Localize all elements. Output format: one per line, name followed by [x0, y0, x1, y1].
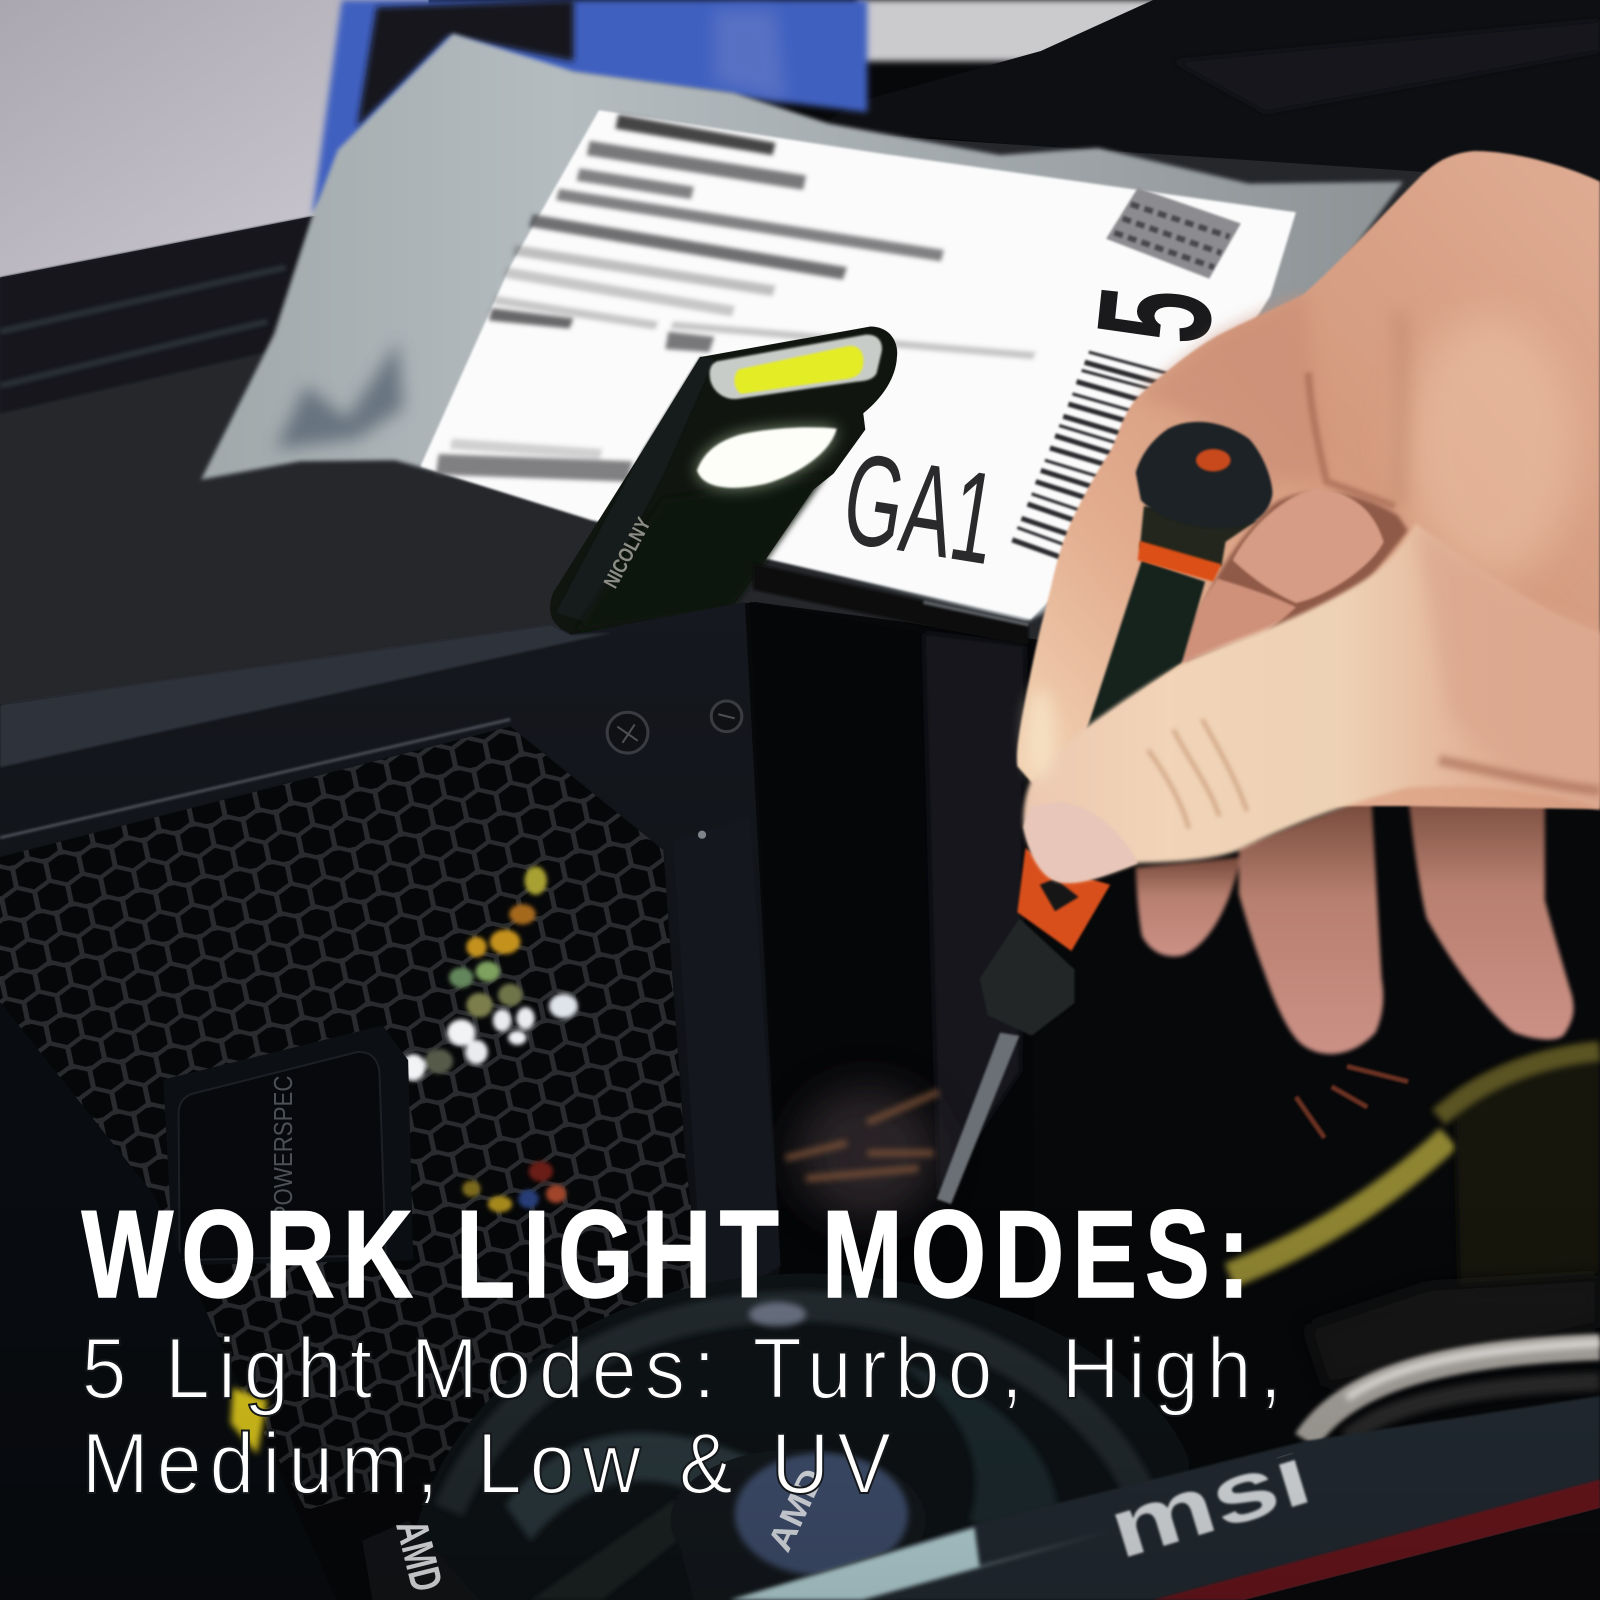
thumbnail — [1023, 802, 1138, 882]
index finger crease — [1308, 372, 1395, 506]
fan hub — [670, 1449, 926, 1592]
knuckle wrinkles — [1148, 719, 1247, 829]
power supply mark: POWERSPEC — [270, 1076, 298, 1220]
hand — [1017, 151, 1600, 809]
screw — [607, 712, 648, 753]
subheading line 2: Medium, Low & UV — [82, 1414, 891, 1511]
body — [550, 327, 897, 634]
hex knob — [980, 918, 1074, 1036]
dark insert — [357, 0, 573, 128]
red stripe — [1153, 1480, 1600, 1600]
body side — [556, 357, 714, 622]
right case strip — [673, 816, 781, 1316]
main lens glow — [697, 427, 837, 488]
plastic bag — [201, 34, 1403, 622]
fan strut — [531, 1500, 704, 1600]
honeycomb vent grill — [0, 727, 781, 1510]
fingertip highlight — [1027, 689, 1055, 781]
blue object — [312, 0, 867, 214]
tucked finger shadow — [1184, 492, 1408, 663]
bottom darkening — [0, 1204, 1600, 1600]
thumb base crease — [1439, 760, 1600, 791]
heat pipe shadow — [1347, 1382, 1600, 1439]
right side cables — [1230, 1046, 1600, 1388]
palm and index finger — [1017, 151, 1600, 809]
body lower face — [577, 474, 827, 631]
screw — [711, 701, 742, 732]
card body — [730, 1396, 1600, 1600]
COB bezel — [710, 335, 882, 399]
vent fade — [0, 727, 704, 1510]
interior dark cavity — [750, 563, 1036, 1600]
yellow clip — [231, 1388, 267, 1454]
tucked finger lower — [1182, 579, 1296, 663]
screwdriver lower handle — [937, 848, 1110, 1204]
screwdriver upper handle — [1087, 422, 1272, 730]
heat pipe — [1306, 1347, 1600, 1441]
tucked finger upper — [1233, 488, 1384, 603]
fan glint — [749, 1302, 806, 1327]
hub logo: AMD — [761, 1463, 832, 1557]
neck — [1140, 506, 1257, 566]
blank badge plate — [163, 1026, 413, 1265]
bag stain — [276, 342, 403, 449]
fan blade — [898, 1362, 1059, 1571]
orange band — [1138, 541, 1221, 582]
heading: WORK LIGHT MODES: — [82, 1184, 1250, 1324]
heat pipe highlight — [1347, 1343, 1600, 1398]
label text rows — [436, 114, 1036, 482]
main lens — [697, 427, 837, 488]
cap — [1136, 422, 1272, 528]
orange grip — [1017, 848, 1110, 951]
card underside — [1245, 1508, 1600, 1600]
cable bundle glow — [796, 1087, 939, 1219]
case edge highlight — [753, 563, 1029, 645]
power supply badge — [179, 1052, 386, 1260]
subheading — [82, 1319, 1282, 1511]
end cap dot — [1196, 449, 1231, 471]
fan colours behind vent — [401, 866, 578, 1212]
work light — [550, 327, 897, 634]
lower fingers — [1136, 786, 1574, 1054]
rivet — [698, 831, 706, 839]
shipping label — [420, 110, 1296, 619]
fan strap — [362, 1520, 480, 1600]
QR code — [1106, 188, 1241, 279]
thumb base blend — [1415, 523, 1600, 796]
palm highlight — [1403, 316, 1577, 582]
bright card edge — [730, 1528, 1112, 1600]
brand mark: NICOLNY — [600, 514, 656, 592]
graphics card — [730, 1343, 1600, 1600]
lower-left dark frame — [0, 1002, 337, 1600]
subheading line 1: 5 Light Modes: Turbo, High, — [82, 1319, 1282, 1417]
cpu fan — [231, 1273, 1189, 1600]
palm fold — [1399, 312, 1402, 506]
upper shaft — [1087, 560, 1205, 730]
blue object highlight — [714, 10, 786, 102]
large 5: 5 — [1062, 280, 1247, 351]
case front panel — [0, 602, 781, 1357]
upper finger shade — [1138, 294, 1327, 480]
thumb — [1023, 523, 1600, 882]
fan blade — [505, 1433, 796, 1541]
computer case top surface — [0, 133, 1600, 714]
barcode — [1012, 352, 1167, 558]
grip inset — [1040, 879, 1079, 911]
vent highlight line — [0, 719, 510, 838]
hub logo disc — [735, 1453, 908, 1576]
GA1 print: GA1 — [834, 426, 1005, 592]
shaft — [937, 1033, 1019, 1204]
textured ledge — [0, 624, 612, 767]
msi logo: msi — [1098, 1427, 1321, 1576]
COB lamp — [734, 346, 863, 394]
